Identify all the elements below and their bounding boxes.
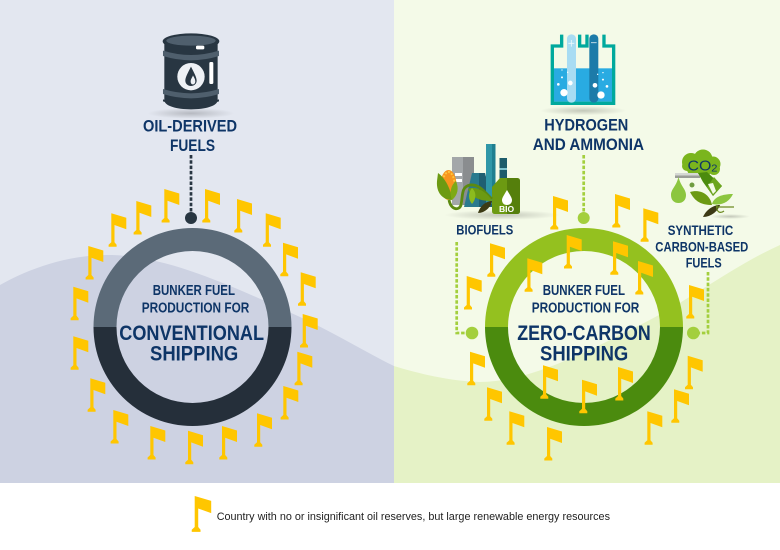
text: zero-carbon ring label: ZERO-CARBON	[517, 322, 651, 345]
text: zero-carbon ring label: BUNKER FUEL	[543, 283, 625, 299]
heading: oil-derived fuels	[143, 118, 237, 155]
label: biofuels: BIOFUELS	[456, 222, 513, 238]
icon: legend flag	[192, 496, 211, 532]
legend	[192, 496, 610, 532]
text: conventional ring label	[119, 283, 264, 366]
icon: oil barrel	[148, 33, 234, 119]
label: synthetic carbon-based fuels: FUELS	[686, 254, 722, 270]
heading: oil-derived fuels: OIL-DERIVED	[143, 118, 237, 136]
text: zero-carbon ring label: SHIPPING	[540, 343, 628, 366]
icon: biofuels factory, corn and canister: BIO	[499, 204, 514, 214]
icon: carbon-based synthetic fuel	[671, 150, 750, 219]
connector: hydrogen and ammonia to ring	[578, 155, 590, 224]
heading: hydrogen and ammonia: AND AMMONIA	[533, 136, 644, 154]
icon: electrolyser tank	[540, 34, 627, 115]
connector: biofuels to ring	[457, 242, 478, 339]
chart: zero-carbon ring	[485, 228, 683, 426]
connector: synthetic fuels to ring	[687, 272, 708, 339]
label: synthetic carbon-based fuels: CARBON-BASED	[655, 238, 748, 254]
heading: hydrogen and ammonia	[533, 117, 644, 154]
connector: oil-derived fuels to ring	[185, 155, 197, 224]
text: conventional ring label: BUNKER FUEL	[153, 283, 235, 299]
text: conventional ring label: SHIPPING	[150, 343, 238, 366]
chart: conventional ring	[94, 228, 292, 426]
text: conventional ring label: CONVENTIONAL	[119, 322, 264, 345]
icon: carbon-based synthetic fuel: 2	[711, 162, 718, 174]
heading: oil-derived fuels: FUELS	[170, 137, 215, 155]
text: zero-carbon ring label	[517, 283, 651, 366]
icon: biofuels factory, corn and canister	[437, 144, 560, 220]
panel: conventional background	[0, 0, 394, 483]
text: conventional ring label: PRODUCTION FOR	[142, 301, 250, 317]
heading: hydrogen and ammonia: HYDROGEN	[544, 117, 628, 135]
flags: conventional ring countries	[71, 189, 318, 464]
label: synthetic carbon-based fuels	[655, 222, 748, 270]
text: zero-carbon ring label: PRODUCTION FOR	[532, 301, 640, 317]
flags: zero-carbon ring countries	[464, 194, 704, 460]
panel: zero-carbon background	[394, 0, 780, 483]
icon: carbon-based synthetic fuel: CO	[688, 158, 710, 174]
legend text: Country with no or insignificant oil reserves, but large renewable energy resources	[217, 511, 610, 523]
label: synthetic carbon-based fuels: SYNTHETIC	[668, 222, 733, 238]
